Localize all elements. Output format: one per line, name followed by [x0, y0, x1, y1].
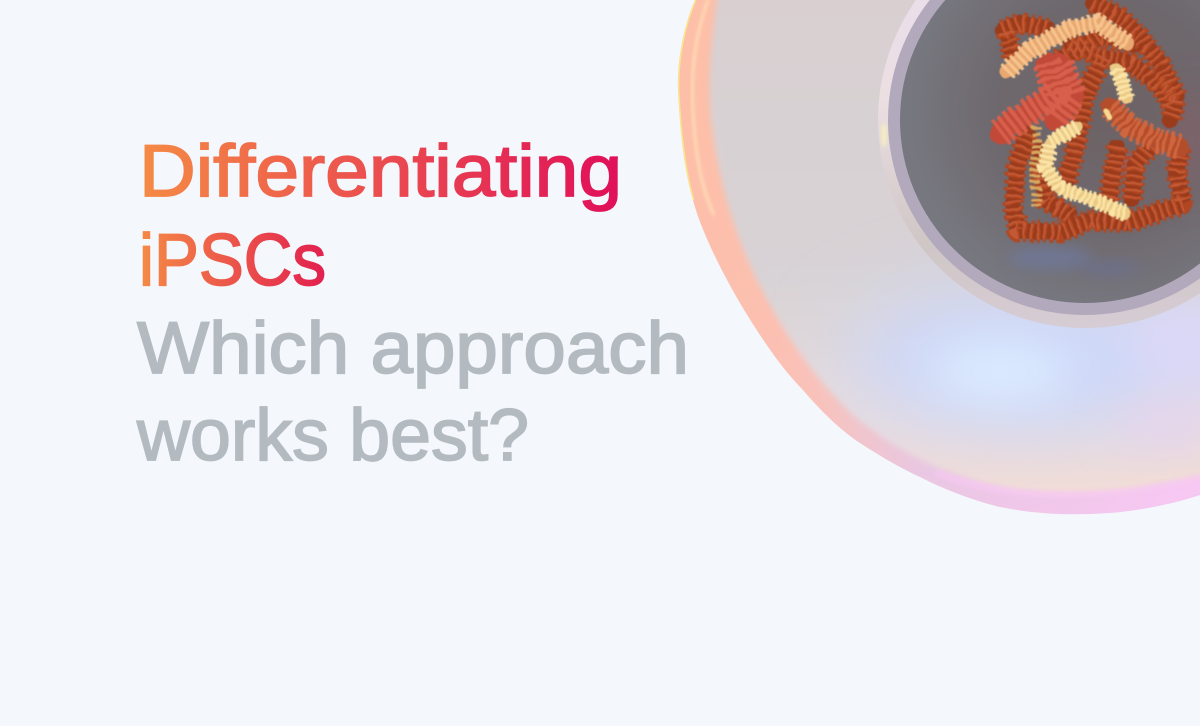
- heading: Differentiating iPSCs: iPSCs: [139, 220, 326, 301]
- cell membrane: [670, 0, 1200, 530]
- nucleus blue haze: [1008, 90, 1200, 276]
- chromatin: pale top arc: [1007, 22, 1127, 72]
- chromatin: yellow strands: [1045, 70, 1127, 213]
- cytoplasm: [710, 0, 1200, 495]
- membrane highlights: [693, 0, 714, 215]
- chromatin: red strands: [1003, 3, 1183, 233]
- heading: Differentiating iPSCs: Differentiating: [139, 131, 622, 212]
- shell highlight: [881, 123, 887, 147]
- nucleus band: [888, 0, 1200, 315]
- chromatin: orange coil: [1110, 107, 1180, 147]
- subheading: Which approach works best?: [136, 308, 689, 476]
- infographic canvas: [136, 0, 1200, 514]
- nucleus interior: [900, 0, 1200, 303]
- nucleus shell: [878, 0, 1200, 328]
- chromatin: [1000, 3, 1183, 233]
- illustration: cell: [670, 0, 1200, 530]
- cytoplasm blue glow: [845, 288, 1200, 447]
- subheading: Which approach works best?: Which approach: [137, 308, 689, 389]
- subheading: Which approach works best?: works best?: [136, 395, 529, 476]
- chromatin: bright red coil: [1000, 63, 1072, 133]
- chromatin: tan thin strand: [1035, 127, 1037, 207]
- heading: Differentiating iPSCs: [139, 131, 622, 301]
